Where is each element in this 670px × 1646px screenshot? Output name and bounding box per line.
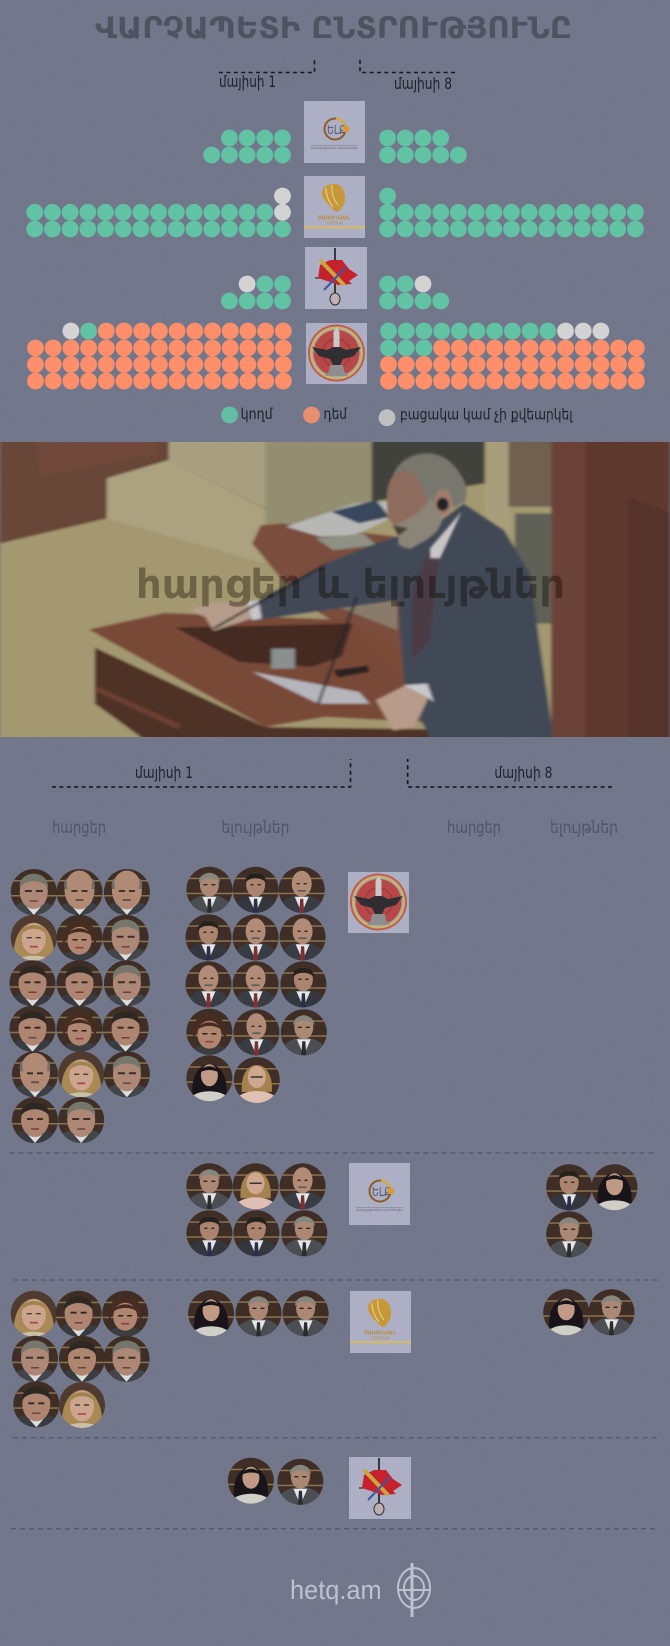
- column header: speeches May 1: ելույթներ: [221, 818, 289, 838]
- bracket: May 1: [219, 57, 314, 72]
- divider: [11, 1528, 656, 1530]
- photo banner: [0, 440, 670, 740]
- divider: [13, 1437, 658, 1439]
- icon: hetq logo: [398, 1563, 430, 1617]
- portraits: Tsarukyan questions May 1: [9, 1290, 152, 1443]
- portraits: Tsarukyan speeches May 8: [542, 1288, 636, 1355]
- party 3 votes: [229, 284, 441, 301]
- party 4 votes: [35, 331, 636, 381]
- legend: [221, 405, 573, 426]
- divider: [10, 1152, 655, 1154]
- logo: Yelk section: [349, 1163, 410, 1225]
- bracket: May 1 section: [52, 759, 350, 787]
- divider: [14, 1279, 659, 1281]
- label: May 8: մայիսի 8: [394, 74, 452, 93]
- legend: for: [221, 405, 273, 423]
- label: May 1: մայիսի 1: [219, 72, 276, 91]
- column header: questions May 1: հարցեր: [52, 818, 106, 838]
- legend: absent: բացակա կամ չի քվեարկել: [400, 406, 573, 424]
- bracket: May 8 section: [408, 759, 612, 787]
- logo: ANC: [305, 247, 367, 309]
- footer brand text: hetq.am: [290, 1575, 382, 1605]
- party 2 votes: [35, 196, 636, 229]
- logo: ANC section: [349, 1457, 411, 1519]
- legend: against: [303, 405, 347, 423]
- portraits: Tsarukyan speeches May 1: [187, 1289, 330, 1356]
- column header: speeches May 8: ելույթներ: [550, 818, 618, 838]
- party 1 votes: [212, 138, 458, 155]
- logo: ARF section: [348, 872, 409, 933]
- photo heading: հարցեր և ելույթներ: [136, 562, 565, 608]
- legend: absent: [379, 406, 573, 426]
- portraits: Yelk speeches May 1: [185, 1162, 328, 1276]
- portraits: ARF speeches May 1: [184, 866, 328, 1115]
- vote chart: [35, 138, 636, 381]
- logo: Yelk: [304, 101, 365, 163]
- portraits: ARF questions May 1: [6, 868, 153, 1159]
- label: May 8 section: մայիսի 8: [494, 763, 552, 782]
- label: May 1 section: մայիսի 1: [135, 763, 193, 782]
- logo: Tsarukyan section: [350, 1291, 411, 1353]
- legend: for: կողմ: [241, 405, 273, 423]
- portraits: ANC speeches May 1: [227, 1457, 324, 1525]
- portraits: Yelk speeches May 8: [545, 1163, 638, 1277]
- column header: questions May 8: հարցեր: [447, 818, 501, 838]
- logo: ARF: [306, 323, 367, 384]
- title: ՎԱՐՉԱՊԵՏԻ ԸՆՏՐՈՒԹՅՈՒՆԸ: [95, 11, 572, 45]
- bracket: May 8: [360, 57, 455, 72]
- logo: Tsarukyan: [304, 176, 365, 238]
- photo: speaker head: [387, 453, 467, 558]
- legend: against: դեմ: [324, 405, 347, 423]
